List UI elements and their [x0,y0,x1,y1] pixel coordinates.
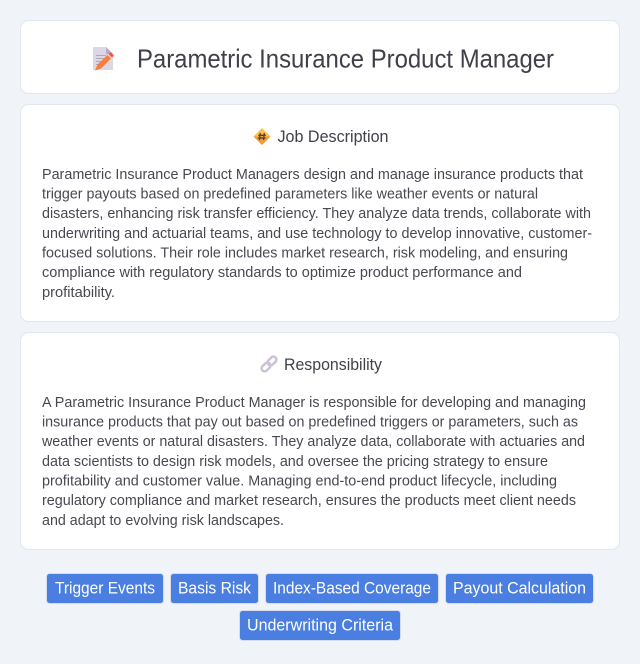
tag: Trigger Events: Trigger Events [55,580,155,598]
text block: job description: underwriting and actuarial teams, and use technology to develop innovative, customer- [42,226,592,242]
text block: responsibility: data scientists to design risk models, and oversee the pricing strategy to ensure [42,454,548,470]
tag: Payout Calculation: Payout Calculation [453,580,586,598]
tag: Basis Risk [170,574,258,604]
text block: responsibility [41,395,586,529]
text block: job description: focused solutions. Their role includes market research, risk modeling, and ensuring [42,246,568,262]
icon: chain link [260,355,278,373]
tag: Underwriting Criteria [240,610,400,640]
heading: responsibility: Responsibility [284,356,383,374]
text block: responsibility: A Parametric Insurance Product Manager is responsible for developing and managing [42,395,586,411]
tag: Index-Based Coverage [266,574,438,604]
tag: Underwriting Criteria: Underwriting Criteria [247,616,394,634]
text block: responsibility: insurance products that pay out based on predefined triggers or parameters, such as [42,414,578,430]
tag: Basis Risk: Basis Risk [178,580,252,598]
panel: title header [20,20,620,94]
panel: responsibility [20,332,620,550]
text block: responsibility: weather events or natural disasters. They analyze data, collaborate with actuaries and [41,434,585,450]
title: Parametric Insurance Product Manager [137,46,554,74]
icon: document with pencil [93,47,114,70]
text block: responsibility: regulatory compliance and market research, ensures the products meet client needs [42,493,576,509]
text block: responsibility: and adapt to evolving risk landscapes. [42,513,284,529]
text block: job description [42,167,592,301]
tag: Index-Based Coverage: Index-Based Coverage [273,580,431,598]
tag: Trigger Events [46,574,164,604]
text block: job description: trigger payouts based on predefined parameters like weather events or natural [42,186,538,202]
text block: job description: Parametric Insurance Product Managers design and manage insurance products that [42,167,583,183]
tag: Payout Calculation [446,574,594,604]
text block: job description: disasters, enhancing risk transfer efficiency. They analyze data trends, collaborate with [42,206,591,222]
panel: job description [20,104,620,322]
text block: responsibility: profitability and customer value. Managing end-to-end product lifecycle, including [42,474,557,490]
text block: job description: profitability. [42,285,115,301]
icon: orange diamond [254,128,270,145]
heading: job description: Job Description [278,128,388,146]
text block: job description: compliance with regulatory standards to optimize product performance and [42,265,522,281]
